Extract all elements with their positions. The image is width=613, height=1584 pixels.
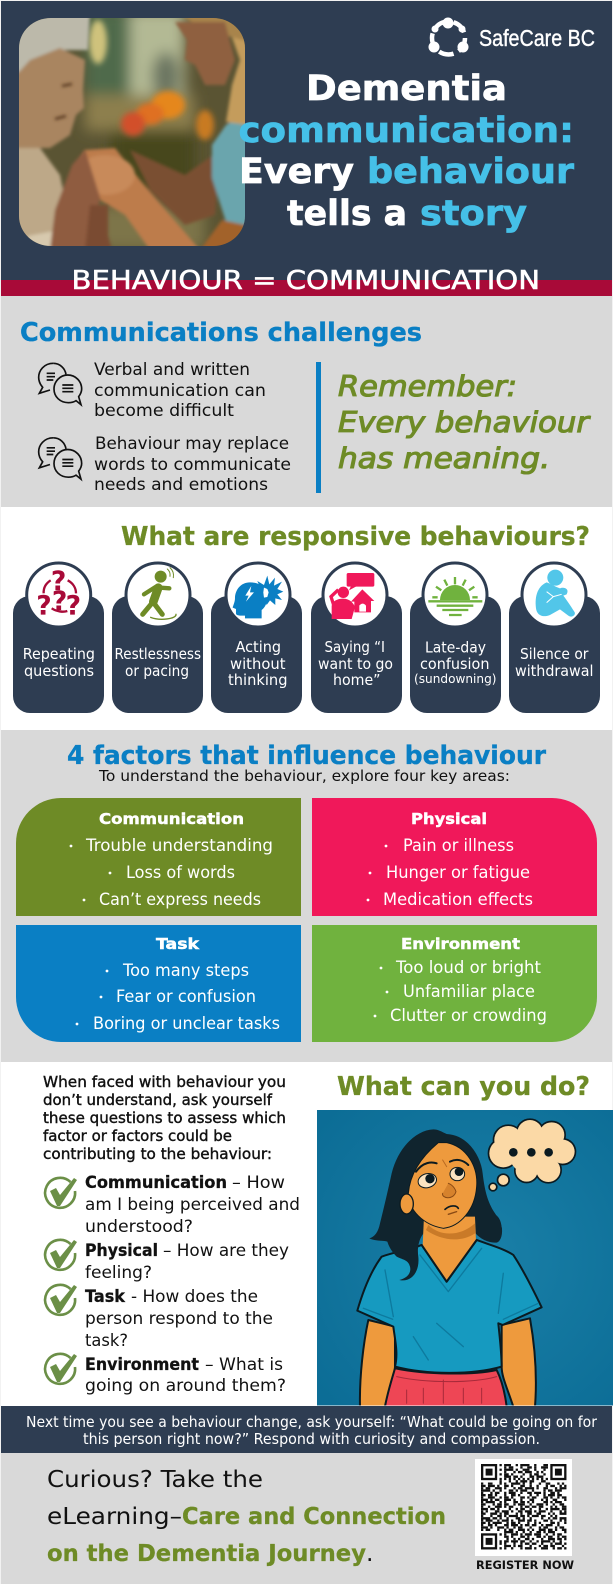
intro text: don’t understand, ask yourself <box>43 1091 273 1109</box>
illustration: woman with thought bubble <box>317 1110 613 1407</box>
icon: speech bubbles <box>39 363 82 405</box>
checklist: task: person respond to the <box>85 1309 273 1328</box>
card: silence or withdrawal: Silence or <box>520 645 589 663</box>
icon: person, speech bubble and house <box>331 573 374 619</box>
text: curious <box>47 1465 446 1567</box>
card: restlessness or pacing <box>112 563 203 713</box>
card: acting without thinking <box>211 563 302 713</box>
panel: 4 factors <box>1 730 612 1062</box>
card: acting without thinking: without <box>230 655 286 673</box>
panel: next time reminder <box>1 1406 612 1453</box>
card: silence or withdrawal <box>509 563 600 713</box>
icon: question marks: ? <box>52 586 67 617</box>
neck <box>423 1217 476 1281</box>
heading: 4 factors: 4 factors that influence behaviour <box>67 741 546 771</box>
checklist: task: task? <box>85 1331 128 1350</box>
card: restlessness or pacing: Restlessness <box>114 645 201 663</box>
icon: head with burst <box>233 576 283 618</box>
arms <box>360 1318 536 1407</box>
box: communication: Trouble understanding <box>85 836 273 855</box>
card: acting without thinking: thinking <box>228 671 288 689</box>
box: task: Too many steps <box>122 961 249 980</box>
trousers <box>385 1368 507 1407</box>
box: physical: Physical <box>411 810 487 828</box>
icon: question marks: ? <box>66 590 81 621</box>
text: curious: eLearning– <box>47 1502 182 1530</box>
checklist: physical: feeling? <box>85 1263 152 1282</box>
intro text: contributing to the behaviour: <box>43 1145 272 1163</box>
title: communication: <box>238 111 574 151</box>
intro text <box>43 1073 286 1163</box>
intro text: factor or factors could be <box>43 1127 232 1145</box>
panel: header <box>1 1 612 296</box>
card: late-day confusion: Late-day <box>425 638 486 656</box>
heading: communications challenges: Communications challenges <box>20 318 422 348</box>
panel: communications challenges <box>1 296 612 507</box>
card: silence or withdrawal: withdrawal <box>515 662 594 680</box>
icon: curled-up figure <box>536 570 575 617</box>
card: saying I want to go home: Saying “I <box>324 638 385 656</box>
title: Every <box>239 152 354 192</box>
checklist: communication: understood? <box>85 1217 193 1236</box>
checklist: task: Task <box>85 1287 126 1306</box>
box: task: Boring or unclear tasks <box>93 1014 280 1033</box>
text: verbal and written <box>94 359 266 420</box>
title <box>238 69 575 234</box>
box: physical: Pain or illness <box>403 836 514 855</box>
card: saying I want to go home: want to go <box>318 655 393 673</box>
card: saying I want to go home: home” <box>333 671 380 689</box>
panel: call to action <box>1 1453 612 1584</box>
hair <box>369 1129 502 1280</box>
photo: nurse holding older woman's hands <box>19 18 245 246</box>
box: environment: Environment <box>401 935 521 953</box>
panel: responsive behaviours <box>1 507 612 730</box>
box: physical <box>312 798 597 916</box>
text: verbal and written: communication can <box>94 380 266 400</box>
intro text: these questions to assess which <box>43 1109 286 1127</box>
callout: remember: has meaning. <box>338 441 550 475</box>
icon: walking figure <box>143 568 176 619</box>
box: communication: Communication <box>99 810 244 828</box>
text: behaviour may replace words: words to communicate <box>94 454 291 474</box>
nurse <box>82 18 245 246</box>
checklist: communication: – How <box>232 1173 285 1192</box>
checklist: environment: – What is <box>205 1355 283 1374</box>
text: verbal and written: become difficult <box>94 400 234 420</box>
face <box>408 1143 477 1228</box>
icon: speech bubbles <box>39 438 82 479</box>
card: late-day confusion: (sundowning) <box>414 672 496 686</box>
text: behaviour may replace words: Behaviour may replace <box>95 433 289 453</box>
card: late-day confusion <box>410 563 501 713</box>
label: register now: REGISTER NOW <box>476 1558 574 1572</box>
box: task: Task <box>156 935 200 953</box>
checklist: environment <box>45 1354 286 1395</box>
box: communication <box>16 798 301 916</box>
checklist: task: - How does the <box>131 1287 258 1306</box>
checklist: physical <box>45 1240 289 1282</box>
text: curious: on the Dementia Journey <box>47 1539 366 1567</box>
icon: setting sun <box>428 577 482 615</box>
checklist: task <box>45 1285 273 1350</box>
heading: what are responsive behaviours: What are responsive behaviours? <box>121 522 590 552</box>
box: task: Fear or confusion <box>116 987 256 1006</box>
title: story <box>420 194 527 234</box>
heading: what can you do: What can you do? <box>337 1072 590 1102</box>
subtitle: To understand the behaviour, explore four key areas: <box>98 767 510 785</box>
checklist: communication: Communication <box>85 1173 227 1192</box>
intro text: When faced with behaviour you <box>43 1073 286 1091</box>
box: communication: Can’t express needs <box>99 890 261 909</box>
card: repeating questions: questions <box>24 662 94 680</box>
box: environment <box>312 925 597 1042</box>
thought bubble <box>489 1120 575 1190</box>
banner: behaviour equals communication: BEHAVIOUR = COMMUNICATION <box>72 266 540 296</box>
panel: what can you do <box>1 1062 613 1407</box>
icon: question marks: ? <box>36 590 52 621</box>
text: behaviour may replace words: needs and emotions <box>94 474 268 494</box>
checklist: physical: Physical <box>85 1241 158 1260</box>
icon: question marks: ? <box>51 566 66 597</box>
card: acting without thinking: Acting <box>236 638 281 656</box>
checklist: environment: going on around them? <box>85 1376 286 1395</box>
text: behaviour may replace words <box>94 433 291 494</box>
card: saying I want to go home <box>311 563 402 713</box>
callout: remember <box>338 369 591 475</box>
text: verbal and written: Verbal and written <box>94 359 250 379</box>
text: curious: . <box>366 1539 373 1567</box>
box: physical: Hunger or fatigue <box>386 863 530 882</box>
box: environment: Too loud or bright <box>395 958 542 977</box>
title: tells a <box>287 194 407 234</box>
box: physical: Medication effects <box>383 890 533 909</box>
older woman <box>19 18 112 246</box>
checklist: communication <box>45 1173 300 1236</box>
shirt <box>357 1240 542 1373</box>
checklist: communication: am I being perceived and <box>85 1195 300 1214</box>
box: environment: Clutter or crowding <box>390 1006 547 1025</box>
callout: remember: Every behaviour <box>338 405 591 439</box>
callout: remember: Remember: <box>338 369 517 403</box>
checklist: physical: – How are they <box>163 1241 289 1260</box>
card: repeating questions: Repeating <box>23 645 95 663</box>
card: restlessness or pacing: or pacing <box>125 662 189 680</box>
title: behaviour <box>367 152 575 192</box>
icon: question marks <box>36 566 81 621</box>
logo: SafeCare BC <box>428 18 595 54</box>
box: task <box>16 925 301 1042</box>
title: Dementia <box>306 69 507 109</box>
checklist: environment: Environment <box>85 1355 199 1374</box>
box: environment: Unfamiliar place <box>403 982 535 1001</box>
text: curious: Care and Connection <box>182 1502 446 1530</box>
text: curious: Curious? Take the <box>47 1465 263 1493</box>
box: communication: Loss of words <box>126 863 235 882</box>
card: late-day confusion: confusion <box>420 655 490 673</box>
QR code <box>475 1459 572 1556</box>
card: repeating questions <box>13 563 104 713</box>
panel: next time reminder: this person right now?” Respond with curiosity and compassion. <box>83 1430 540 1448</box>
